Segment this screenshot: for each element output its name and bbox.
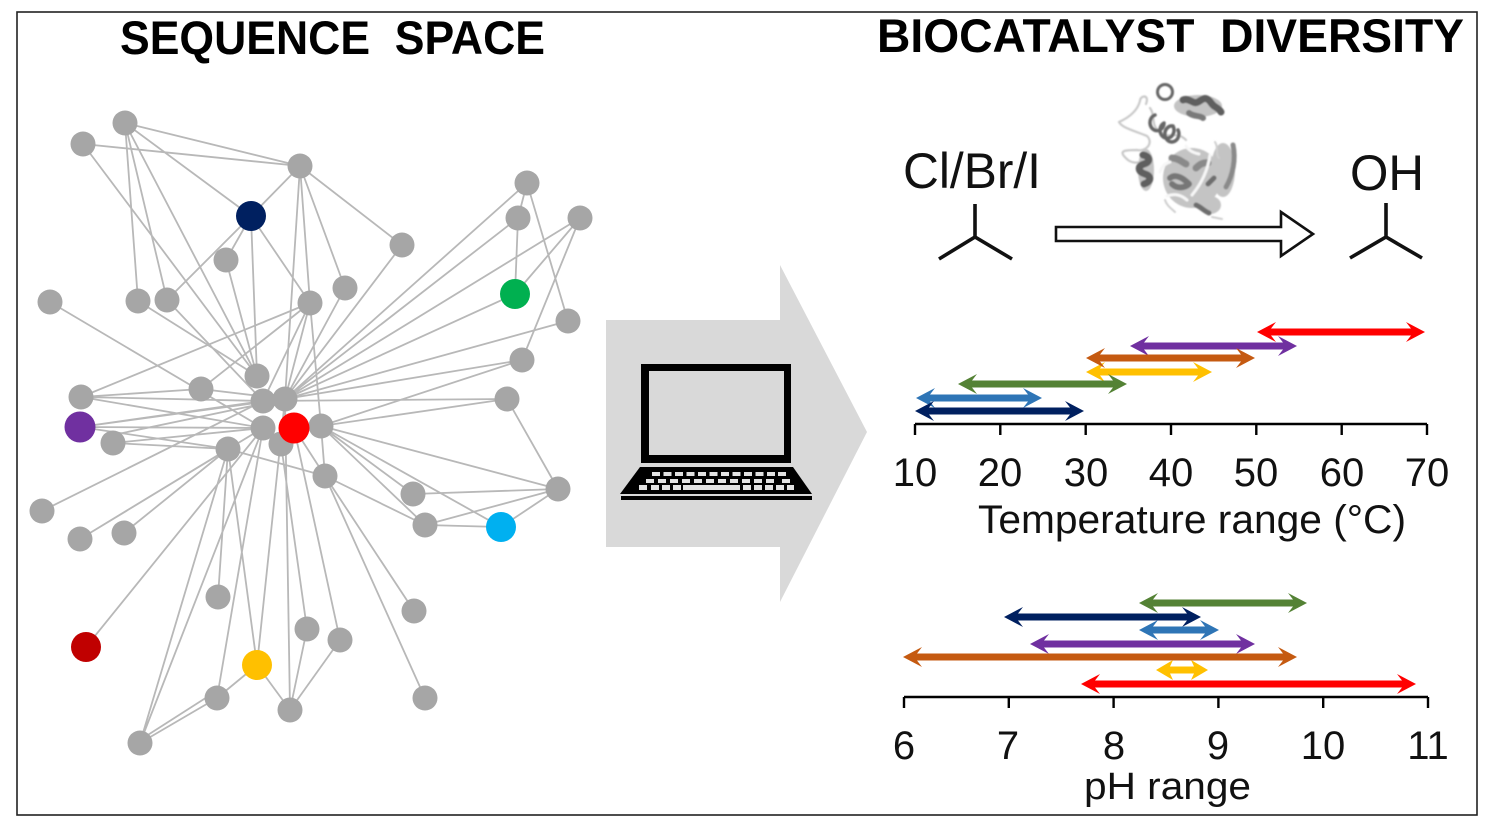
reaction arrow <box>1056 212 1313 256</box>
gray sequence nodes <box>30 110 592 756</box>
title: biocatalyst diversity: BIOCATALYST DIVERSITY <box>877 9 1464 62</box>
pH tick labels <box>893 724 1449 768</box>
temperature tick labels: 20 <box>978 451 1022 495</box>
pH tick labels: 10 <box>1301 724 1345 768</box>
large gray process arrow <box>606 265 867 602</box>
temperature tick labels: 30 <box>1064 451 1108 495</box>
temperature axis title: Temperature range (°C) <box>978 498 1406 542</box>
temperature tick labels: 10 <box>893 451 937 495</box>
network graph: sequence space <box>30 110 592 756</box>
network edges <box>42 123 580 743</box>
chart: pH range <box>893 593 1449 808</box>
substrate molecule <box>939 204 1012 259</box>
temperature tick labels: 70 <box>1405 451 1449 495</box>
pH tick labels: 8 <box>1103 724 1125 768</box>
pH tick labels: 9 <box>1207 724 1229 768</box>
pH axis title: pH range <box>1084 766 1251 808</box>
title: sequence space: SEQUENCE SPACE <box>120 11 545 64</box>
laptop keyboard <box>639 472 794 490</box>
product label: OH <box>1350 145 1424 201</box>
temperature tick labels <box>893 451 1449 495</box>
temperature axis <box>915 424 1427 435</box>
temperature range arrows <box>915 322 1425 421</box>
protein structure <box>1119 84 1235 219</box>
temperature tick labels: 60 <box>1320 451 1364 495</box>
temperature tick labels: 50 <box>1234 451 1278 495</box>
pH tick labels: 6 <box>893 724 915 768</box>
substrate label: Cl/Br/I <box>903 143 1041 199</box>
product molecule <box>1350 203 1422 258</box>
pH axis <box>904 697 1428 708</box>
reaction scheme <box>903 84 1424 259</box>
pH tick labels: 11 <box>1407 724 1449 768</box>
pH range arrows <box>903 593 1416 694</box>
coloured sequence nodes <box>64 201 530 680</box>
temperature tick labels: 40 <box>1149 451 1193 495</box>
pH tick labels: 7 <box>997 724 1019 768</box>
chart: temperature range <box>893 322 1449 542</box>
icon: laptop <box>620 364 812 500</box>
